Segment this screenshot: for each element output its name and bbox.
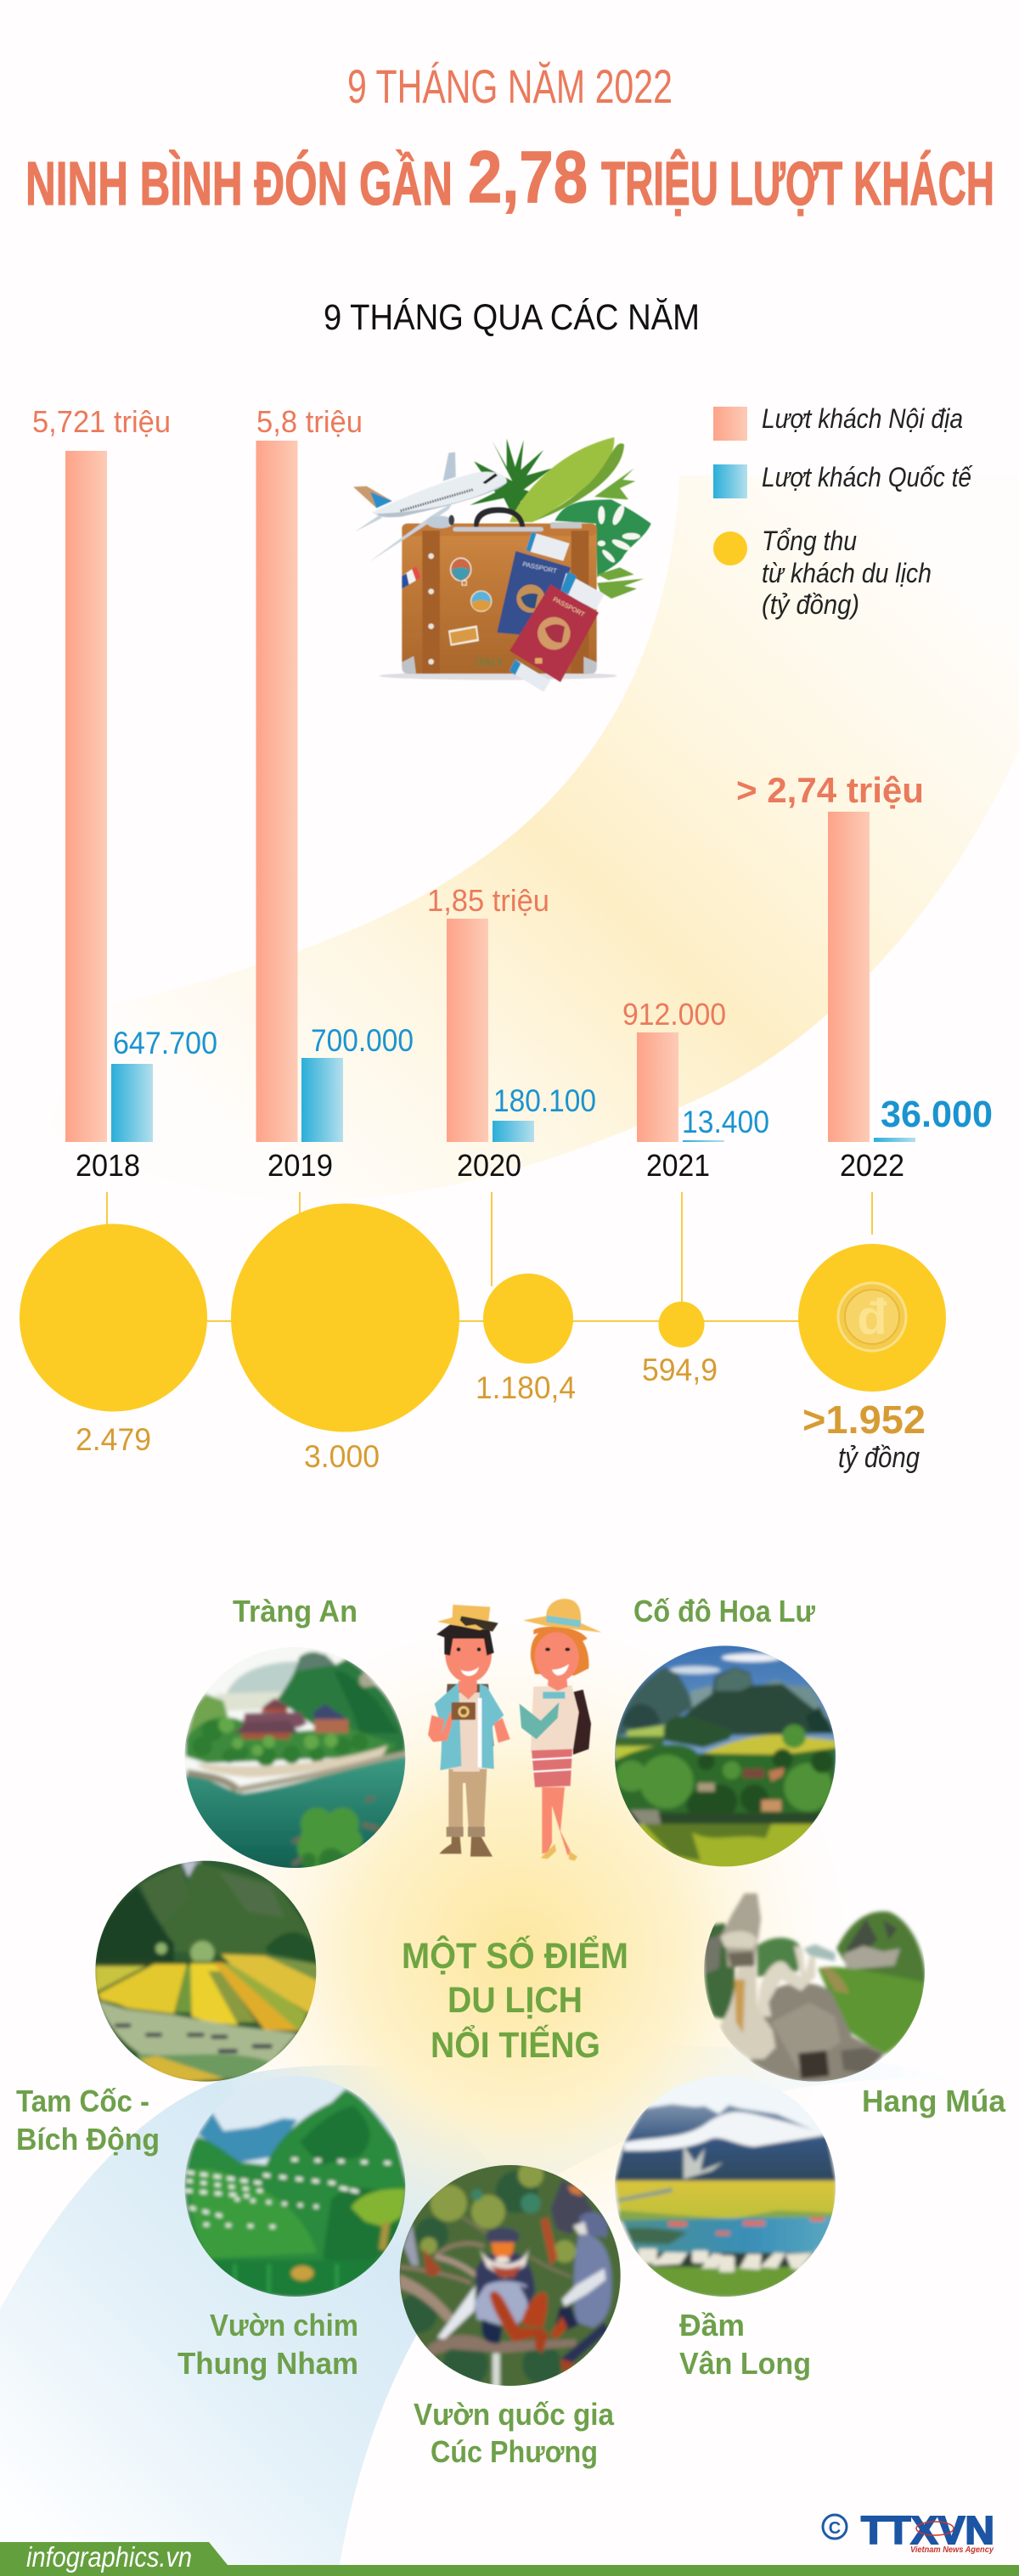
pale blue swoosh right — [408, 2046, 960, 2199]
illustration: suitcase, plane and leaves — [353, 437, 651, 692]
illustration: two tourists — [428, 1599, 601, 1861]
logo: TTXVN: C — [829, 2519, 841, 2538]
blue background swoosh — [0, 2065, 521, 2576]
label: Đầm Vân Long: Vân Long — [679, 2346, 811, 2381]
revenue bubble chart — [20, 1192, 946, 1474]
label: Vườn chim Thung Nham: Thung Nham — [177, 2346, 358, 2381]
legend — [713, 403, 973, 620]
logo: TTXVN: Vietnam News Agency — [910, 2545, 994, 2555]
title: headline: 2,78 — [468, 137, 588, 218]
sticker: colosseum — [448, 626, 479, 646]
ticket upper — [526, 532, 570, 561]
bars 2020: 180.100 — [493, 1083, 596, 1118]
label: Vườn chim Thung Nham — [177, 2308, 358, 2381]
monkey back top — [541, 2180, 593, 2265]
passport: blue — [497, 551, 571, 638]
bars 2021: 2021 — [646, 1148, 710, 1183]
sticker: flag — [402, 566, 421, 588]
bars 2021: 912.000 — [622, 997, 726, 1032]
bubble 2021 — [642, 1302, 718, 1387]
label: Vườn quốc gia Cúc Phương — [414, 2397, 615, 2469]
bubble 2022 with coin — [798, 1244, 946, 1474]
photo: Vườn chim Thung Nham — [178, 2072, 412, 2301]
title: headline — [25, 137, 994, 218]
bubble 2020 — [476, 1274, 576, 1405]
dragon — [756, 1946, 815, 2016]
illustration: suitcase, plane and leaves: ITALY — [476, 656, 504, 668]
bars 2018: 2018 — [76, 1148, 140, 1183]
bars 2019 — [256, 404, 414, 1183]
bubble 2022 with coin: tỷ đồng — [838, 1442, 920, 1474]
bars 2022: 2022 — [840, 1148, 904, 1183]
yellow glow — [187, 1622, 849, 2284]
bars 2019: 700.000 — [311, 1023, 414, 1058]
section heading: famous destinations: MỘT SỐ ĐIỂM — [402, 1935, 628, 1977]
ticket lower — [560, 571, 605, 610]
main monkey — [437, 2228, 549, 2354]
photo: Cố đô Hoa Lư — [607, 1643, 841, 1872]
label: Tràng An: Tràng An — [233, 1594, 357, 1628]
section heading: famous destinations: DU LỊCH — [448, 1980, 583, 2021]
man — [428, 1605, 510, 1857]
bars 2020: 2020 — [457, 1148, 521, 1183]
ticket bottom — [510, 660, 550, 692]
legend: total revenue — [713, 526, 932, 620]
photo: Tràng An — [178, 1643, 412, 1874]
legend: total revenue: Tổng thu — [762, 526, 857, 556]
label: Tam Cốc - Bích Động — [16, 2084, 160, 2157]
bars 2018 — [32, 404, 217, 1183]
photo: Hang Múa — [704, 1893, 926, 2083]
photo: Đầm Vân Long — [607, 2072, 841, 2301]
label: Vườn quốc gia Cúc Phương: Cúc Phương — [431, 2434, 598, 2469]
bars 2018: 5,721 triệu — [32, 404, 171, 439]
passport: red — [510, 584, 599, 682]
legend: international visitors: Lượt khách Quốc tế — [762, 462, 973, 492]
footer bar with site name: infographics.vn — [26, 2541, 192, 2573]
bars 2019: 5,8 triệu — [256, 404, 363, 439]
footer bar with site name — [0, 2541, 1019, 2576]
yellow background swoosh — [51, 475, 1019, 1201]
bubble 2020: 1.180,4 — [476, 1370, 576, 1405]
passport: red: PASSPORT — [552, 595, 586, 618]
bars 2018: 647.700 — [113, 1026, 217, 1060]
bars 2022: > 2,74 triệu — [736, 770, 924, 810]
section heading: famous destinations: NỔI TIẾNG — [431, 2023, 600, 2066]
passport: blue: PASSPORT — [522, 560, 558, 575]
subtitle: 9 THÁNG QUA CÁC NĂM — [324, 297, 700, 338]
label: Tam Cốc - Bích Động: Tam Cốc - — [16, 2084, 149, 2118]
photo: Tam Cốc - Bích Động — [89, 1855, 323, 2084]
label: Đầm Vân Long: Đầm — [679, 2308, 745, 2343]
bars 2022 — [736, 770, 993, 1183]
label: Cố đô Hoa Lư: Cố đô Hoa Lư — [633, 1594, 816, 1628]
bubble 2018: 2.479 — [76, 1422, 151, 1457]
label: Hang Múa: Hang Múa — [862, 2084, 1006, 2118]
plane — [353, 453, 507, 562]
bubble 2018 — [20, 1224, 207, 1457]
bars 2020 — [427, 883, 596, 1183]
monkey right — [550, 2212, 611, 2373]
bar chart: visitors by year — [32, 404, 993, 1183]
bars 2022: 36.000 — [881, 1094, 993, 1135]
bars 2021: 13.400 — [682, 1105, 769, 1139]
label: Vườn quốc gia Cúc Phương: Vườn quốc gia — [414, 2397, 615, 2432]
legend: total revenue: từ khách du lịch — [762, 558, 932, 588]
legend: international visitors — [713, 462, 973, 498]
title: period: 9 THÁNG NĂM 2022 — [347, 59, 673, 113]
photo: Vườn quốc gia Cúc Phương — [395, 2161, 628, 2390]
bars 2019: 2019 — [267, 1148, 333, 1183]
label: Đầm Vân Long — [679, 2308, 811, 2381]
logo: TTXVN: TTXVN — [861, 2508, 994, 2552]
label: Vườn chim Thung Nham: Vườn chim — [210, 2308, 358, 2343]
bars 2020: 1,85 triệu — [427, 883, 549, 918]
legend: total revenue: (tỷ đồng) — [762, 589, 859, 620]
bubble 2019 — [231, 1204, 459, 1474]
title: headline: NINH BÌNH ĐÓN GẦN — [25, 149, 453, 218]
bubble 2022 with coin: >1.952 — [802, 1398, 926, 1442]
temple — [263, 1698, 288, 1713]
bubble 2019: 3.000 — [304, 1439, 380, 1474]
legend: domestic visitors: Lượt khách Nội địa — [762, 403, 963, 434]
bars 2021 — [622, 997, 769, 1183]
bubble 2021: 594,9 — [642, 1353, 718, 1387]
sticker: beach — [471, 591, 492, 611]
monkey left background — [403, 2223, 419, 2265]
icon: dong coin: đ — [857, 1290, 887, 1345]
legend: domestic visitors — [713, 403, 963, 441]
label: Tam Cốc - Bích Động: Bích Động — [16, 2122, 160, 2157]
sticker: balloon — [451, 558, 471, 585]
section heading: famous destinations — [402, 1935, 628, 2066]
woman — [520, 1599, 601, 1861]
icon: dong coin — [838, 1283, 906, 1351]
